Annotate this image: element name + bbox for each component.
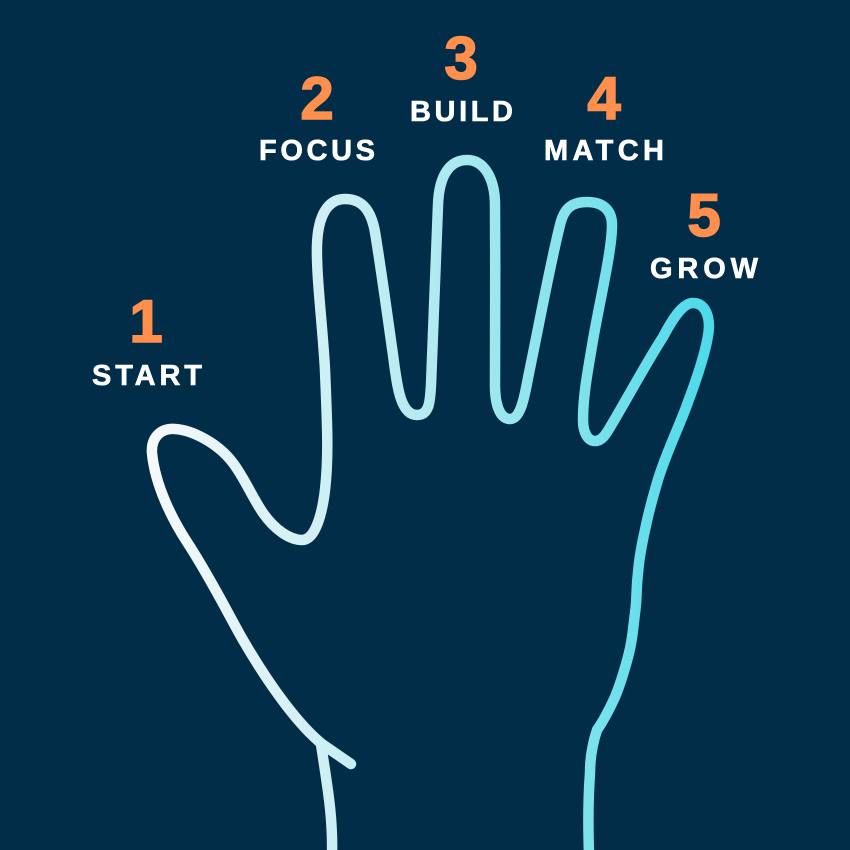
step 3: build (410, 25, 513, 128)
number 3: 3 (444, 25, 478, 92)
step 5: grow (650, 182, 759, 285)
hand outline (152, 160, 709, 850)
step 4: match (544, 65, 664, 167)
step 2: focus (259, 65, 375, 167)
number 4: 4 (587, 65, 621, 132)
label grow: GROW (650, 253, 759, 285)
label match: MATCH (544, 135, 664, 167)
label start: START (92, 360, 202, 392)
number 2: 2 (300, 65, 334, 132)
outline: left wrist (321, 744, 332, 850)
label build: BUILD (410, 96, 513, 128)
label focus: FOCUS (259, 135, 375, 167)
step 1: start (92, 288, 202, 392)
number 5: 5 (687, 182, 721, 249)
outline: thumb, fingers and right wrist (152, 160, 709, 850)
number 1: 1 (129, 288, 163, 355)
